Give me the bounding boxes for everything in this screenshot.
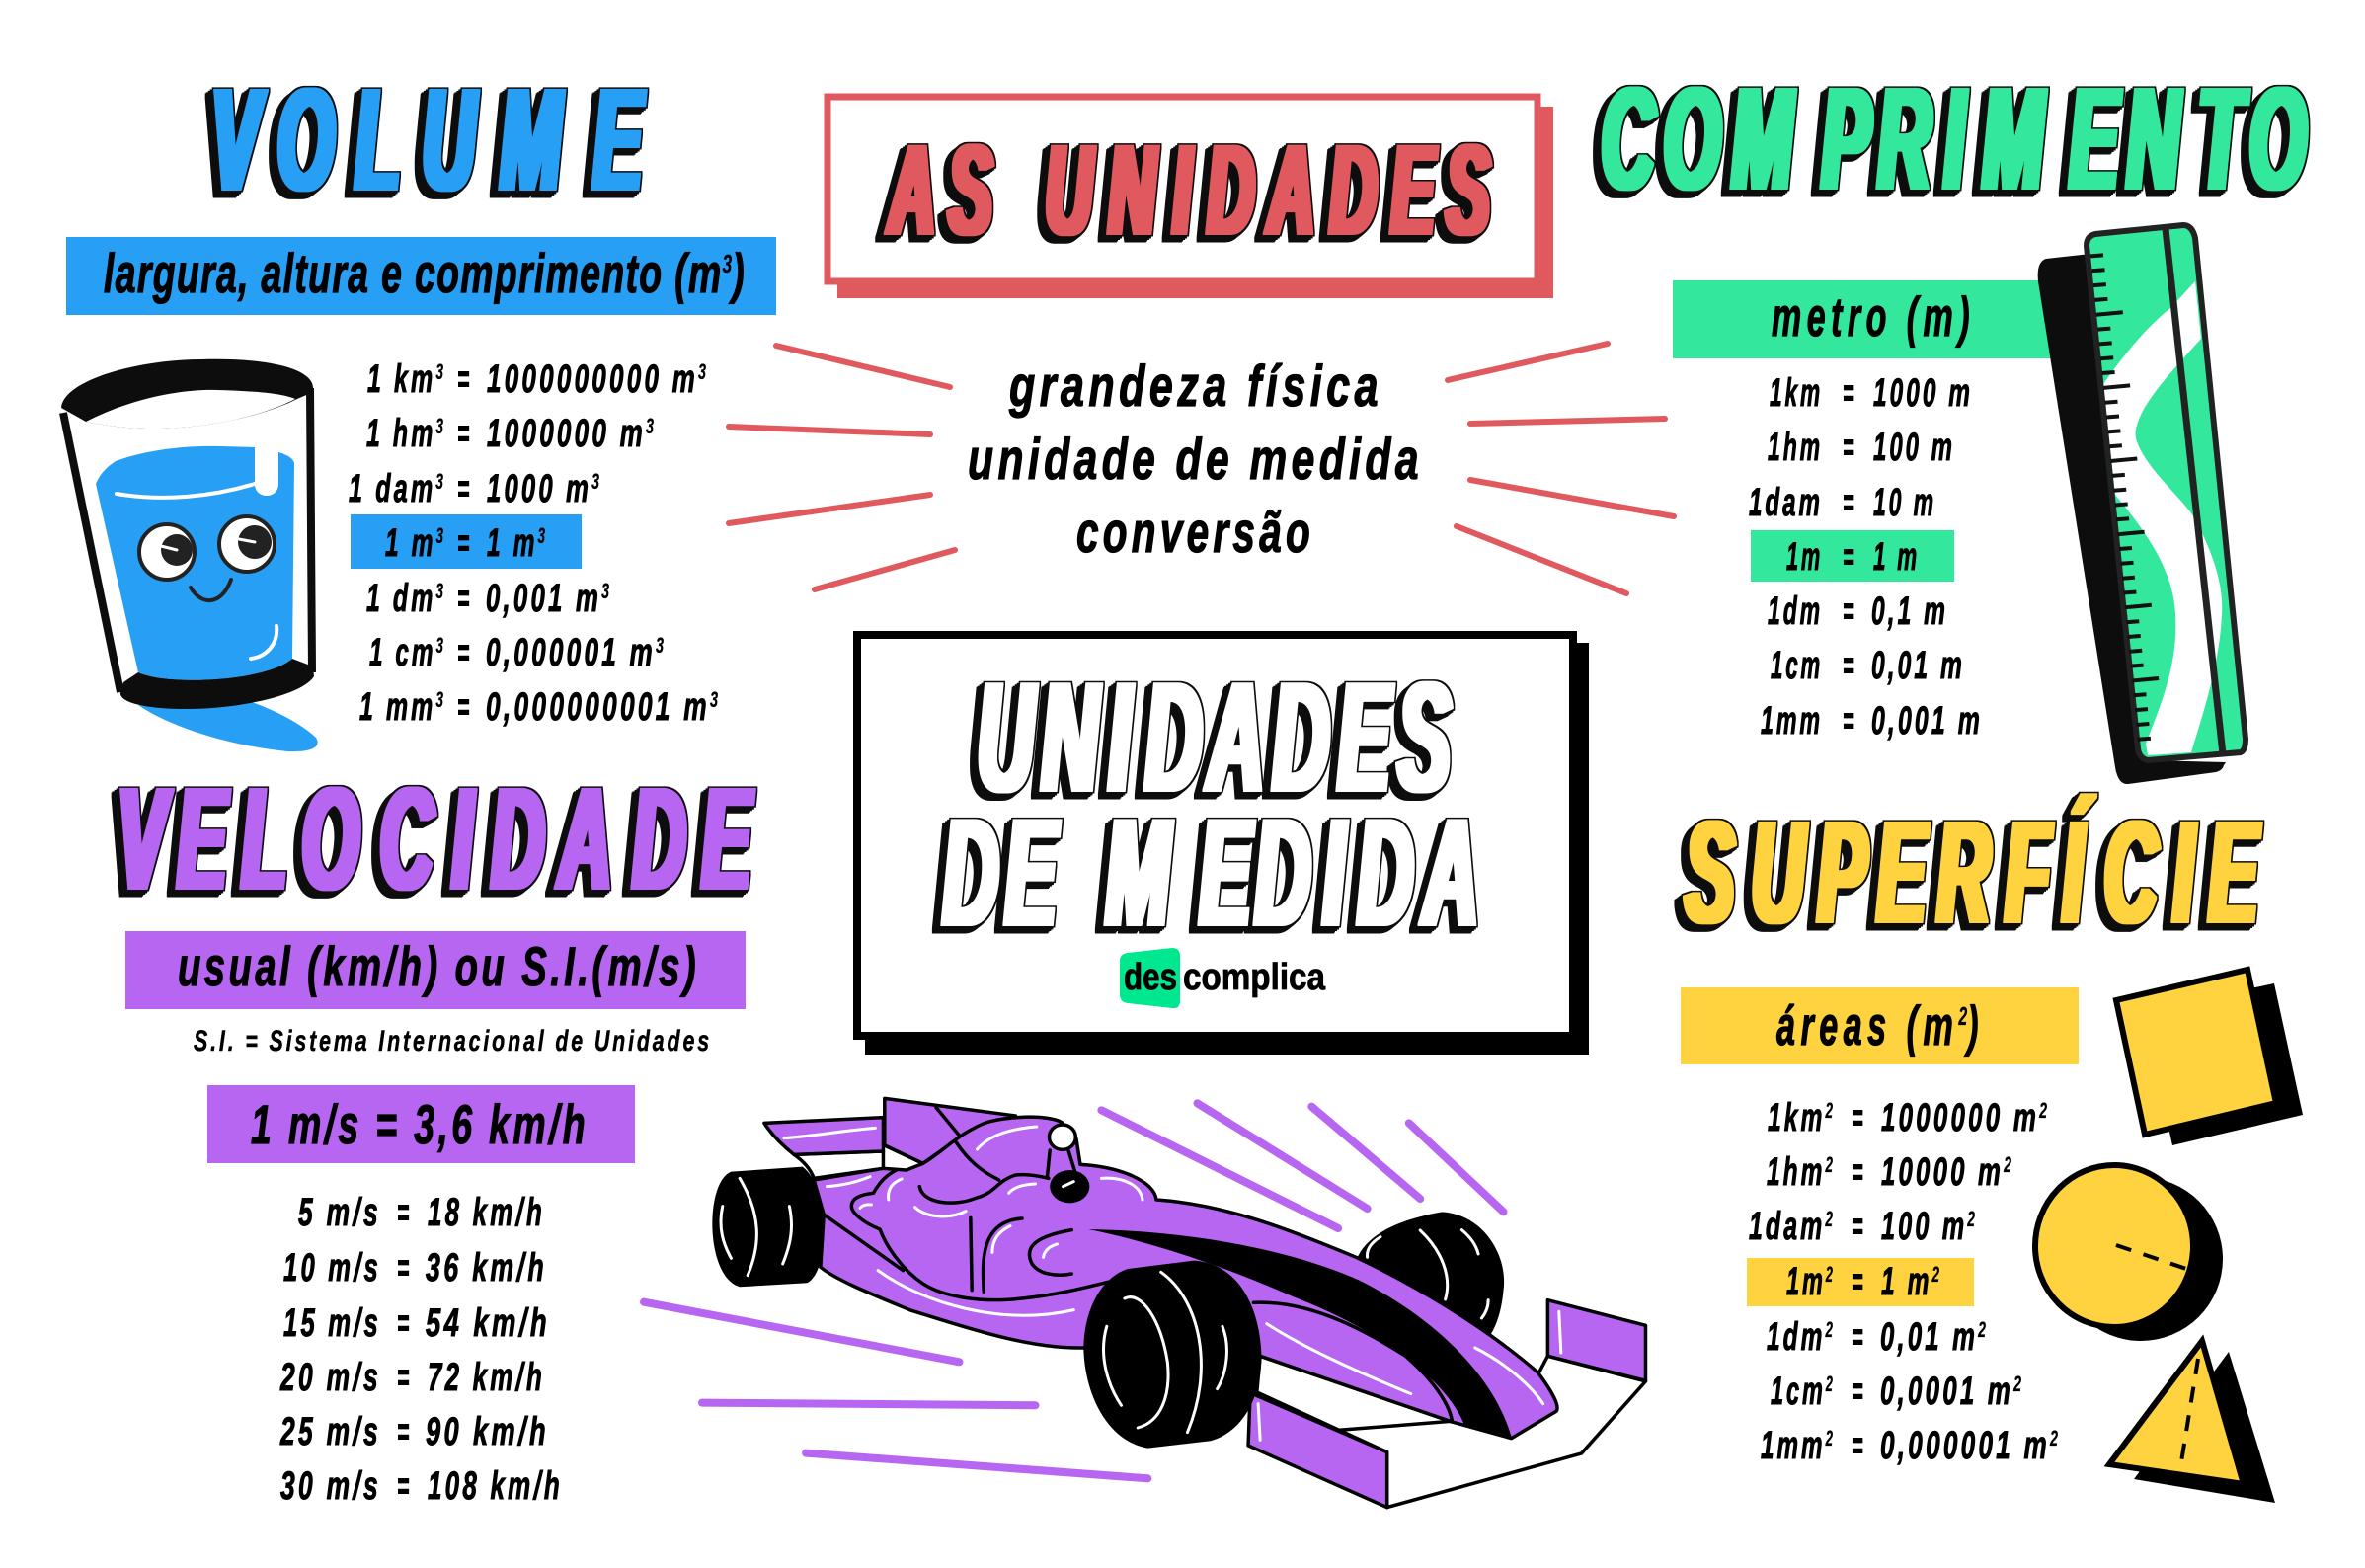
conversion table: velocidade: = [397, 1410, 412, 1453]
logo: descomplica [1120, 948, 1326, 1008]
conversion table: superficie: 1dm [1767, 1315, 1862, 1359]
conversion table: volume: 0,000001 m [486, 631, 747, 674]
conversion table: volume: 1 m [487, 521, 570, 565]
rear tyre [712, 1167, 824, 1287]
conversion table: comprimento: = [1843, 371, 1856, 415]
conversion table: comprimento: 0,01 m [1871, 644, 1965, 687]
conversion table: volume: = [457, 685, 472, 729]
conversion table: velocidade: 5 m/s [298, 1191, 381, 1234]
conversion table: superficie: 2 [1825, 1098, 1833, 1123]
conversion table: comprimento: = [1843, 589, 1856, 633]
banner: volume definition [66, 237, 776, 315]
conversion table: superficie: 10000 m [1881, 1150, 2072, 1194]
conversion table: velocidade: 25 m/s [279, 1410, 381, 1453]
conversion table: velocidade: 36 km/h [426, 1246, 547, 1290]
conversion table: comprimento: 0,001 m [1871, 699, 1983, 743]
conversion table: volume: 1 mm [359, 685, 482, 729]
conversion table: comprimento: = [1843, 535, 1856, 579]
conversion table: comprimento: 1mm [1761, 699, 1823, 743]
title: velocidade: VELOCIDADE [118, 757, 752, 920]
banner: volume definition: 3 [723, 249, 733, 278]
conversion table: volume: 3 [435, 579, 443, 603]
conversion table: volume [349, 357, 718, 729]
conversion table: volume: 1 hm [366, 412, 478, 455]
conversion table: velocidade: = [397, 1246, 412, 1290]
conversion table: superficie: 1m [1786, 1260, 1853, 1303]
icon: circle [2035, 1165, 2223, 1341]
conversion table: volume: 3 [601, 579, 609, 603]
conversion table: comprimento: 1cm [1771, 644, 1823, 687]
conversion table: comprimento: = [1843, 699, 1856, 743]
conversion table: superficie: 2 [1931, 1262, 1939, 1287]
conversion table: velocidade: 18 km/h [428, 1191, 545, 1234]
conversion table: volume: 1000000000 m [487, 357, 812, 401]
far front tyre [1356, 1212, 1504, 1338]
conversion table: velocidade: = [397, 1301, 412, 1345]
conversion table: comprimento: 1hm [1768, 426, 1823, 469]
heading: unidades de medida [943, 651, 1478, 958]
conversion table: superficie: 2 [1825, 1262, 1833, 1287]
conversion table: superficie: 2 [2049, 1426, 2058, 1450]
text block: key concepts: unidade de medida [968, 428, 1423, 492]
conversion table: volume: 1 dm [366, 577, 478, 620]
conversion table: velocidade: 108 km/h [428, 1464, 563, 1508]
conversion table: volume: = [457, 631, 472, 674]
conversion table: volume: 0,001 m [486, 577, 666, 620]
banner: speed conversion [207, 1085, 635, 1163]
heading: as unidades: AS UNIDADES [887, 118, 1489, 262]
conversion table: volume: 1 km [367, 357, 477, 401]
banner: volume definition: ) [729, 242, 746, 304]
conversion table: volume: 3 [436, 633, 443, 658]
banner: velocidade units [125, 931, 746, 1009]
title: comprimento: COMPRIMENTO [1602, 57, 2306, 220]
banner: areas [1681, 987, 2079, 1064]
conversion table: volume: 3 [698, 359, 706, 384]
conversion table: superficie: 2 [1825, 1372, 1833, 1396]
banner: velocidade units: usual (km/h) ou S.I.(m/s) [178, 935, 699, 997]
conversion table: superficie: 1000000 m [1881, 1096, 2125, 1139]
logo: descomplica: des [1124, 957, 1177, 998]
conversion table: volume: 3 [435, 687, 443, 712]
conversion table: comprimento: 1000 m [1873, 371, 1973, 415]
conversion table: comprimento [1749, 371, 1983, 743]
conversion table: superficie: 1hm [1767, 1150, 1862, 1194]
conversion table: superficie [1747, 1096, 2058, 1467]
conversion table: velocidade: = [397, 1464, 412, 1508]
conversion table: superficie: 2 [2038, 1098, 2047, 1123]
conversion table: comprimento: 1dam [1749, 481, 1823, 524]
note: sistema internacional: S.I. = Sistema Internacional de Unidades [194, 1025, 712, 1058]
conversion table: comprimento: 1m [1786, 535, 1823, 579]
rays: right of concepts [1448, 344, 1674, 593]
conversion table: velocidade: 30 m/s [280, 1464, 381, 1508]
conversion table: superficie: 0,0001 m [1880, 1370, 2087, 1413]
illustration: racing car [644, 1098, 1645, 1508]
banner: speed conversion: 1 m/s = 3,6 km/h [251, 1093, 589, 1155]
conversion table: velocidade: = [397, 1356, 412, 1399]
conversion table: comprimento: = [1843, 644, 1856, 687]
conversion table: superficie: 1cm [1771, 1370, 1864, 1413]
conversion table: velocidade: 54 km/h [426, 1301, 550, 1345]
conversion table: volume: 3 [646, 414, 654, 438]
conversion table: velocidade [279, 1191, 563, 1508]
conversion table: volume: 3 [435, 414, 443, 438]
conversion table: superficie: 1mm [1761, 1424, 1867, 1467]
conversion table: superficie: 2 [1825, 1426, 1833, 1450]
conversion table: volume: 3 [591, 469, 599, 494]
car body [814, 1117, 1557, 1439]
rays: left of concepts [729, 346, 955, 589]
conversion table: superficie: = [1852, 1370, 1865, 1413]
conversion table: comprimento: 1dm [1768, 589, 1823, 633]
conversion table: superficie: 1 m [1881, 1260, 1964, 1303]
banner: metro: metro (m) [1772, 285, 1975, 348]
conversion table: velocidade: 90 km/h [426, 1410, 549, 1453]
conversion table: comprimento: 10 m [1873, 481, 1936, 524]
conversion table: volume: 3 [435, 359, 443, 384]
conversion table: superficie: = [1852, 1096, 1865, 1139]
icon: square [2116, 970, 2303, 1145]
title: superficie: SUPERFÍCIE [1686, 791, 2259, 954]
conversion table: comprimento: 0,1 m [1871, 589, 1948, 633]
banner: areas: 2 [1958, 1001, 1967, 1031]
rear wing [764, 1098, 1015, 1178]
conversion table: velocidade: 15 m/s [283, 1301, 381, 1345]
conversion table: volume: 0,000000001 m [486, 685, 827, 729]
banner: areas: ) [1964, 994, 1984, 1057]
icon: ruler [2038, 225, 2246, 784]
conversion table: volume: = [457, 577, 472, 620]
conversion table: volume: 1000000 m [487, 412, 731, 455]
text block: key concepts: grandeza física [1008, 354, 1382, 419]
conversion table: volume: 1000 m [487, 467, 651, 510]
conversion table: superficie: = [1852, 1424, 1865, 1467]
conversion table: comprimento: = [1843, 426, 1856, 469]
conversion table: superficie: = [1852, 1315, 1865, 1359]
conversion table: superficie: 2 [2012, 1372, 2021, 1396]
icon: triangle [2109, 1341, 2275, 1503]
conversion table: comprimento: 100 m [1873, 426, 1955, 469]
panel: as unidades title box [828, 97, 1553, 298]
text block: key concepts [968, 354, 1423, 565]
conversion table: superficie: = [1852, 1260, 1865, 1303]
conversion table: velocidade: = [397, 1191, 412, 1234]
conversion table: superficie: 2 [1967, 1207, 1975, 1231]
conversion table: superficie: 0,01 m [1880, 1315, 2033, 1359]
front wing [1248, 1300, 1645, 1508]
heading: unidades de medida: UNIDADES [978, 651, 1451, 824]
conversion table: volume: 3 [656, 633, 664, 658]
conversion table: velocidade: 20 m/s [279, 1356, 381, 1399]
conversion table: volume: 3 [435, 469, 443, 494]
heading: unidades de medida: DE MEDIDA [943, 787, 1478, 958]
conversion table: volume: = [457, 521, 472, 565]
logo: descomplica: complica [1183, 957, 1326, 998]
conversion table: volume: 1 dam [349, 467, 488, 510]
conversion table: volume: 3 [435, 523, 443, 548]
conversion table: superficie: 1km [1768, 1096, 1861, 1139]
conversion table: superficie: 100 m [1881, 1205, 2017, 1248]
banner: volume definition: largura, altura e comprimento (m [104, 242, 1030, 304]
banner: areas: áreas (m [1776, 994, 2075, 1057]
front tyre [1083, 1261, 1261, 1449]
title: volume: VOLUME [211, 58, 644, 221]
conversion table: volume: 3 [710, 687, 718, 712]
conversion table: velocidade: 10 m/s [283, 1246, 381, 1290]
conversion table: volume: = [457, 357, 472, 401]
conversion table: velocidade: 72 km/h [428, 1356, 545, 1399]
panel: unidades de medida title box [857, 635, 1589, 1055]
conversion table: volume: = [457, 467, 472, 510]
icon: glass of water character [61, 359, 318, 751]
conversion table: volume: 1 cm [369, 631, 479, 674]
conversion table: superficie: 2 [2003, 1152, 2011, 1177]
conversion table: superficie: 0,000001 m [1880, 1424, 2141, 1467]
conversion table: comprimento: = [1843, 481, 1856, 524]
conversion table: volume: 1 m [385, 521, 468, 565]
conversion table: volume: 3 [537, 523, 545, 548]
conversion table: comprimento: 1 m [1873, 535, 1920, 579]
text block: key concepts: conversão [1076, 501, 1314, 565]
conversion table: superficie: 2 [1825, 1152, 1833, 1177]
conversion table: superficie: 2 [1825, 1207, 1833, 1231]
conversion table: comprimento: 1km [1770, 371, 1823, 415]
speed lines [644, 1103, 1504, 1478]
conversion table: superficie: 2 [1825, 1317, 1833, 1342]
conversion table: superficie: 1dam [1749, 1205, 1872, 1248]
conversion table: volume: = [457, 412, 472, 455]
conversion table: superficie: 2 [1977, 1317, 1986, 1342]
conversion table: superficie: = [1852, 1205, 1865, 1248]
conversion table: superficie: = [1852, 1150, 1865, 1194]
banner: metro [1673, 280, 2058, 358]
